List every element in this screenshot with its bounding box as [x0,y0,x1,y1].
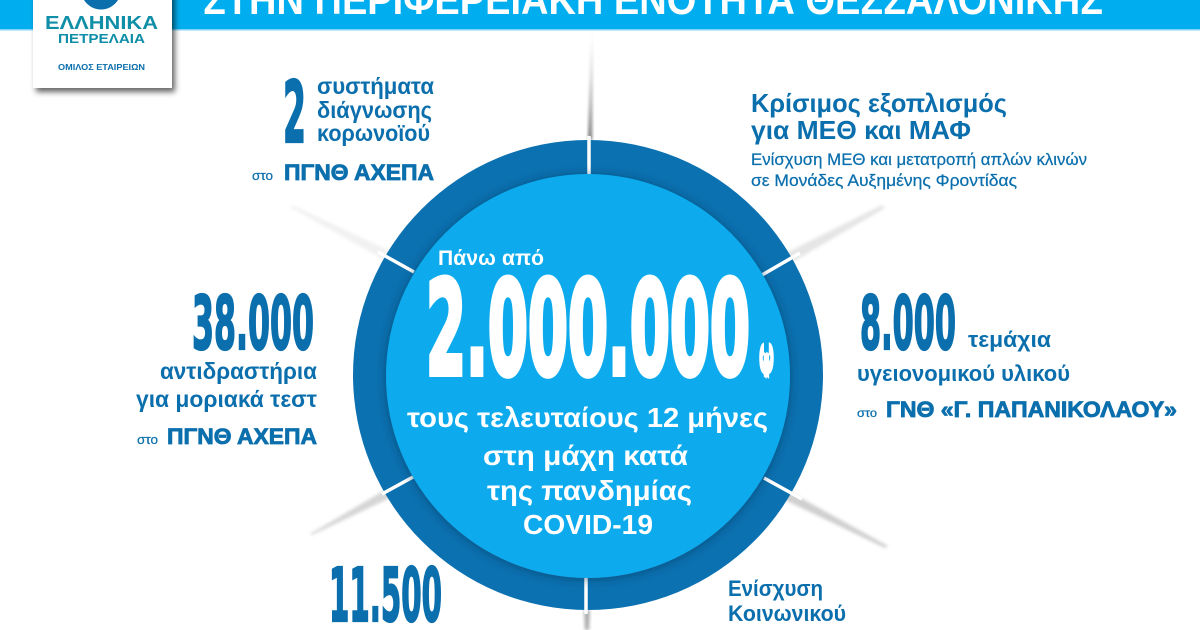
block: 38.000 reagents: ΠΓΝΘ ΑΧΕΠΑ [167,424,317,449]
central donut [353,136,823,614]
header bar [0,0,1200,30]
center text: τους τελευταίους 12 μήνες [407,402,768,433]
inner circle [386,174,790,578]
block: social support: Κοινωνικού [728,601,846,626]
ring gaps [378,136,802,614]
block: 8.000 pieces: 8.000 [860,281,956,367]
logo wordmark: ΕΛΛΗΝΙΚΑ [45,13,158,33]
block: social support [728,576,846,626]
block: 8.000 pieces: τεμάχια [968,327,1051,352]
block: 38.000 reagents: για μοριακά τεστ [136,386,317,412]
center text [407,247,777,540]
center text: Πάνω από [438,247,544,270]
block: 2 diagnostic systems: συστήματα [317,73,434,99]
center text: € [757,344,777,376]
block: 2 diagnostic systems: κορωνοϊού [317,120,430,146]
center text: COVID-19 [523,509,653,540]
block: 2 diagnostic systems [252,64,434,185]
icon: globe [84,0,118,9]
block: 38.000 reagents [136,281,317,449]
block: 8.000 pieces: υγειονομικού υλικού [857,361,1070,386]
block: 2 diagnostic systems: 2 [283,64,306,163]
block: critical equipment: σε Μονάδες Αυξημένης Φροντίδας [751,171,1017,190]
block: 8.000 pieces: ΓΝΘ «Γ. ΠΑΠΑΝΙΚΟΛΑΟΥ» [886,397,1177,422]
block: 38.000 reagents: στο [137,432,158,447]
block: critical equipment: Ενίσχυση ΜΕΘ και μετατροπή απλών κλινών [751,150,1087,169]
block: 8.000 pieces [857,281,1177,422]
logo card: ΠΕΤΡΕΛΑΙΑ [58,32,145,46]
text: 38.000 [192,281,314,367]
block: critical equipment [751,88,1087,190]
block: 2 diagnostic systems: διάγνωσης [317,97,432,123]
block: 2 diagnostic systems: ΠΓΝΘ ΑΧΕΠΑ [284,160,434,185]
block: social support: Ενίσχυση [728,576,823,601]
block: 8.000 pieces: στο [857,406,877,420]
center text: στη μάχη κατά [483,440,688,471]
block: 38.000 reagents: αντιδραστήρια [160,358,317,384]
central donut: 2.000.000 [426,253,750,405]
block: 2 diagnostic systems: στο [252,168,273,183]
outer ring [353,140,823,610]
spoke shadows [290,30,888,630]
block: critical equipment: για ΜΕΘ και ΜΑΦ [751,115,971,145]
logo card: ΟΜΙΛΟΣ ΕΤΑΙΡΕΙΩΝ [58,63,145,72]
center text: της πανδημίας [487,475,692,506]
block: critical equipment: Κρίσιμος εξοπλισμός [751,88,1007,118]
logo card [33,0,172,88]
